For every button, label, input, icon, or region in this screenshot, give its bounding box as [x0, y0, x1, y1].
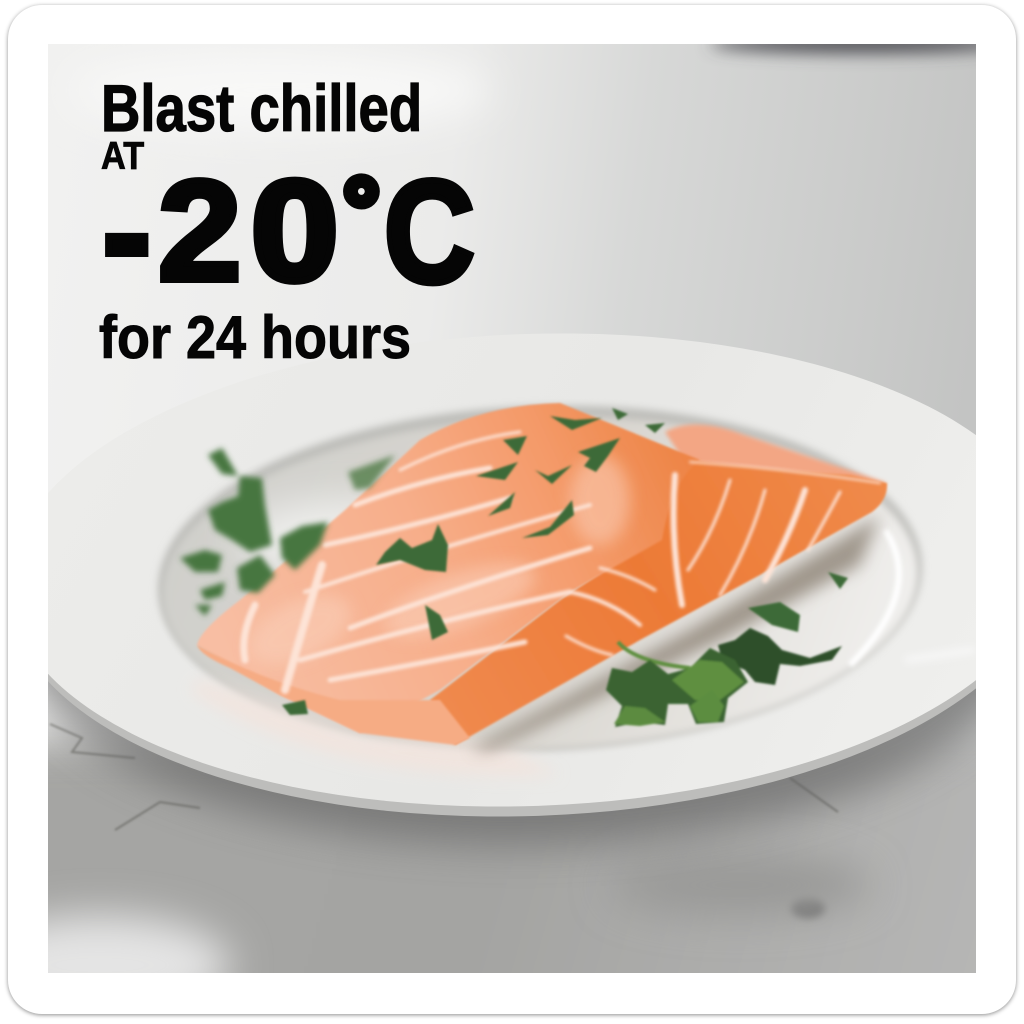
- temperature: -20°C: °: [343, 159, 380, 261]
- top face: [197, 403, 700, 733]
- parsley sprig, right cluster: [606, 628, 842, 727]
- shadow under fillet: [470, 515, 880, 750]
- front edge: [197, 645, 470, 745]
- temperature: -20°C: -: [103, 154, 151, 313]
- back piece of fillet: [665, 424, 887, 500]
- parsley, blurred left cluster: [180, 448, 395, 616]
- temperature: -20°C: [103, 150, 475, 313]
- flesh highlights: [238, 455, 630, 679]
- temperature: -20°C: C: [384, 150, 475, 313]
- parsley on fillet and plate: [282, 408, 848, 715]
- white fat lines: [244, 432, 880, 690]
- label: AT: AT: [101, 135, 144, 178]
- salmon fillet: [197, 403, 887, 750]
- heading: Blast chilled: Blast chilled: [101, 71, 422, 145]
- temperature: -20°C: 0: [251, 152, 338, 311]
- right side face: [430, 460, 887, 745]
- duration: for 24 hours: for 24 hours: [99, 304, 411, 371]
- temperature: -20°C: 2: [158, 152, 242, 311]
- plate: [0, 316, 1024, 845]
